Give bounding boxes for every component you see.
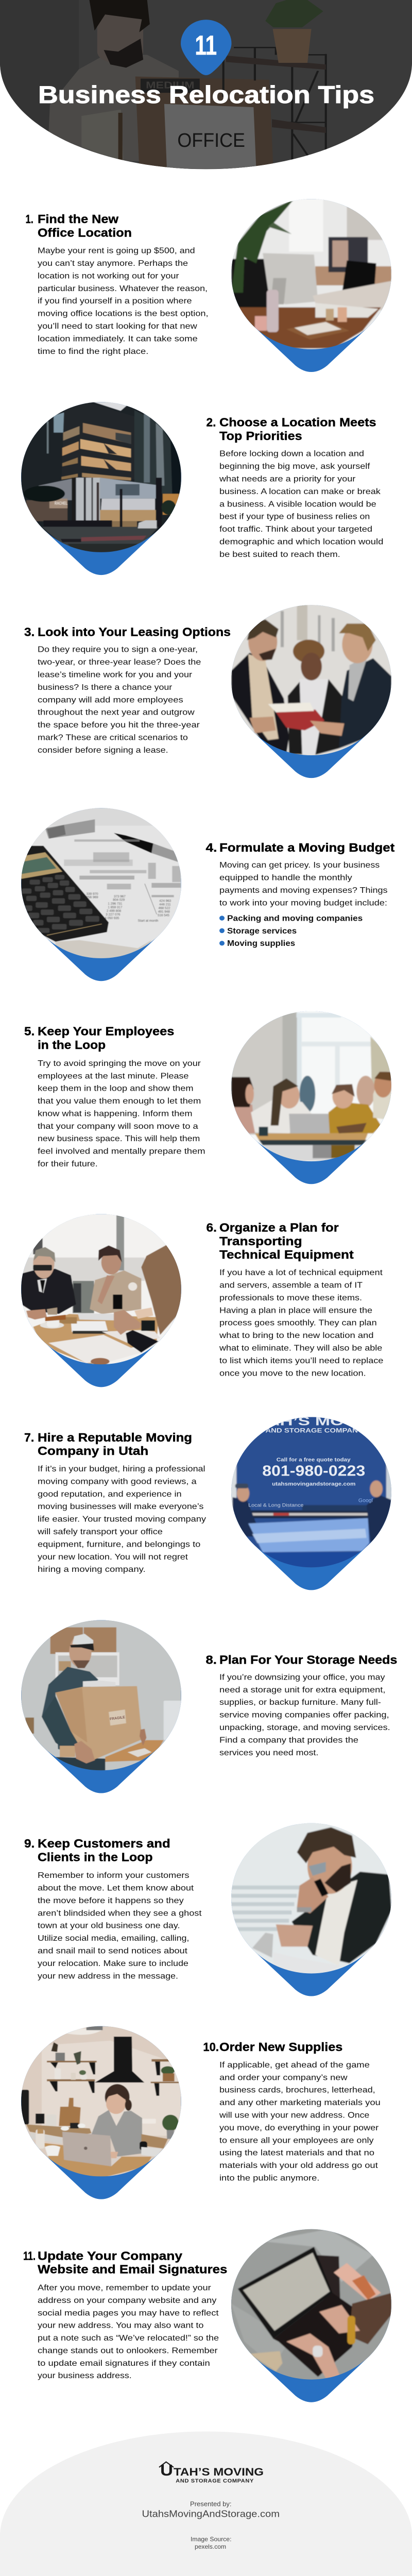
pin image: calculator and budget sheet: Start at month: [138, 919, 159, 923]
body text 3: throughout the next year and outgrow: [38, 708, 195, 717]
body text 7: good reputation, and experience in: [38, 1490, 182, 1499]
body text 5: Try to avoid springing the move on your: [38, 1059, 201, 1068]
pin image: calculator and budget sheet: 516 545: [158, 914, 169, 917]
body text 8: If you’re downsizing your office, you may: [219, 1673, 385, 1682]
body text 7: hiring a moving company.: [38, 1566, 146, 1574]
heading 1: Office Location: [38, 226, 132, 240]
body text 11: to update email signatures if they contain: [38, 2359, 210, 2368]
panel: tip 3: [24, 603, 394, 778]
body text 8: need a storage unit for extra equipment,: [219, 1686, 385, 1694]
body text 5: employees at the last minute. Please: [38, 1072, 189, 1080]
footer panel: [0, 2431, 412, 2576]
logo: Utah's Moving: U: [160, 2461, 173, 2479]
body text 6: what to eliminate. They will also be able: [219, 1344, 382, 1352]
body text 6: to list which items you’ll need to replace: [219, 1357, 384, 1365]
body text 2: business. A location can make or break: [219, 487, 381, 496]
bullet list: Storage services: [227, 927, 297, 936]
heading 5: Keep Your Employees: [38, 1025, 174, 1039]
pin image: woman at kitchen laptop: [21, 2026, 181, 2199]
body text 10: and any other marketing materials you: [219, 2099, 381, 2107]
body text 9: and snail mail to send notices about: [38, 1947, 187, 1955]
hero photo: OFFICE: [177, 129, 245, 151]
pin image: calculator and budget sheet: 491 948: [158, 910, 170, 914]
body text 1: Maybe your rent is going up $500, and: [38, 247, 195, 256]
body text 1: time to find the right place.: [38, 347, 148, 356]
pin image: moving truck: Googl: [358, 1498, 373, 1503]
body text 8: unpacking, storage, and moving services.: [219, 1723, 390, 1732]
heading 8: Plan For Your Storage Needs: [219, 1653, 397, 1667]
panel: tip 8: [21, 1620, 397, 1793]
heading 3: Look into Your Leasing Options: [38, 625, 231, 639]
pin image: office building: [21, 402, 181, 575]
pin image: calculator and budget sheet: 468 522: [159, 907, 170, 910]
body text 7: If it’s in your budget, hiring a professional: [38, 1465, 205, 1473]
panel: tip 6: [21, 1214, 384, 1387]
pin image: calculator and budget sheet: 446 211: [159, 903, 171, 906]
body text 6: If you have a lot of technical equipment: [219, 1269, 383, 1277]
pin image: team around laptop: [229, 1009, 394, 1184]
body text 10: [219, 2061, 381, 2182]
body text 11: your business address.: [38, 2372, 132, 2380]
heading 9: Keep Customers and: [38, 1837, 170, 1851]
body text 2: beginning the big move, ask yourself: [219, 463, 370, 471]
pin image: mover with box: [21, 1620, 181, 1793]
body text 6: once you move to the new location.: [219, 1369, 366, 1378]
presented by: Presented by:: [190, 2500, 232, 2507]
hero banner: [0, 0, 412, 174]
heading 3: 3.: [24, 625, 35, 639]
pin image: calculator and budget sheet: 424 963: [159, 899, 171, 903]
body text 5: that you value them enough to let them: [38, 1097, 201, 1106]
body text 11: put a note such as “We’ve relocated!” so the: [38, 2334, 219, 2343]
heading 5: [24, 1025, 174, 1052]
image source: pexels.com: [195, 2543, 226, 2550]
body text 1: [38, 247, 209, 356]
pin image: calculator and budget sheet: 2 499 808: [107, 909, 122, 913]
heading 2: Top Priorities: [219, 429, 302, 443]
body text 4: equipped to handle the monthly: [219, 874, 352, 882]
body text 10: and order your company’s new: [219, 2074, 348, 2082]
pin image: calculator and budget sheet: 804 029: [113, 899, 125, 902]
bullet list: Packing and moving companies: [227, 914, 363, 923]
heading 2: 2.: [207, 416, 216, 429]
body text 11: change stands out to onlookers. Remember: [38, 2347, 218, 2355]
body text 5: [38, 1059, 205, 1168]
body text 9: [38, 1872, 202, 1980]
panel: tip 7: [24, 1414, 394, 1590]
heading 1: Find the New: [38, 213, 118, 226]
pin image: office desk: [229, 196, 394, 372]
body text 6: process goes smoothly. They can plan: [219, 1319, 377, 1328]
pin image: moving truck: AND STORAGE COMPAN: [265, 1427, 358, 1434]
body text 3: consider before signing a lease.: [38, 746, 168, 755]
body text 4: payments and moving expenses? Things: [219, 886, 388, 895]
pin image: calculator and budget sheet: 3 227 076: [106, 913, 121, 917]
body text 7: equipment, furniture, and belongings to: [38, 1540, 200, 1549]
body text 11: address on your company website and any: [38, 2296, 216, 2305]
body text 10: business cards, brochures, letterhead,: [219, 2086, 375, 2095]
body text 9: the move before it happens so they: [38, 1896, 184, 1905]
body text 7: your new location. You will not regret: [38, 1553, 188, 1562]
body text 10: If applicable, get ahead of the game: [219, 2061, 370, 2070]
heading 7: 7.: [24, 1431, 34, 1445]
heading 7: [24, 1431, 192, 1458]
hero photo: [0, 0, 326, 174]
pin image: hands typing on laptop: [229, 2227, 394, 2402]
pin image: moving truck: utahsmovingandstorage.com: [272, 1482, 355, 1487]
body text 5: keep them in the loop and show them: [38, 1084, 194, 1093]
pin image: moving truck: [229, 1414, 394, 1590]
body text 3: [38, 646, 201, 755]
pin image: calculator and budget sheet: 4 050 935: [105, 917, 119, 920]
body text 6: professionals to move these items.: [219, 1294, 362, 1302]
panel: tip 9: [24, 1820, 394, 1996]
body text 2: a business. A visible location would be: [219, 500, 376, 509]
body text 8: services you need most.: [219, 1749, 318, 1757]
pin image: business meeting: [21, 1214, 181, 1387]
pin image: mover with box: FRAGILE: [109, 1715, 126, 1721]
body text 3: the space before you hit the three-year: [38, 721, 200, 730]
body text 2: best if your type of business relies on: [219, 513, 370, 521]
presented by: UtahsMovingAndStorage.com: [142, 2509, 280, 2519]
body text 5: know what is happening. Inform them: [38, 1110, 192, 1118]
logo: Utah's Moving: [159, 2461, 264, 2484]
body text 10: you move, do everything in your power: [219, 2124, 379, 2132]
heading 2: [207, 416, 376, 443]
body text 5: new business space. This will help them: [38, 1135, 200, 1143]
heading 2: Choose a Location Meets: [219, 416, 376, 429]
heading 9: [24, 1837, 170, 1864]
body text 9: your new address in the message.: [38, 1972, 178, 1980]
body text 9: Remember to inform your customers: [38, 1872, 189, 1880]
body text 8: service moving companies offer packing,: [219, 1711, 389, 1720]
body text 5: that your company will soon move to a: [38, 1122, 198, 1131]
heading 4: 4.: [206, 841, 217, 855]
body text 9: about the move. Let them know about: [38, 1884, 194, 1892]
body text 6: Having a plan in place will ensure the: [219, 1307, 372, 1315]
body text 7: moving company with good reviews, a: [38, 1478, 197, 1486]
image source: Image Source:: [191, 2536, 231, 2543]
body text 10: using the latest materials and that no: [219, 2149, 374, 2158]
heading 9: 9.: [24, 1837, 35, 1851]
body text 3: two-year, or three-year lease? Does the: [38, 658, 201, 667]
pin image: moving truck: Local & Long Distance: [248, 1502, 303, 1507]
body text 2: [219, 450, 383, 559]
heading 6: [207, 1221, 354, 1262]
body text 3: mark? These are critical scenarios to: [38, 734, 188, 742]
heading 11: [23, 2249, 227, 2276]
pin image: calculator and budget sheet: 1 296 731: [108, 902, 123, 906]
pin image: moving truck: AH’S MO: [267, 1414, 344, 1428]
body text 4: Moving can get pricey. Is your business: [219, 861, 380, 870]
panel: tip 11: [23, 2227, 394, 2402]
pin image: calculator and budget sheet: 373 967: [114, 895, 126, 899]
body text 2: what needs are a priority for your: [219, 475, 356, 483]
panel: tip 10: [21, 2026, 381, 2199]
heading 5: in the Loop: [38, 1039, 106, 1052]
presented by: [142, 2500, 280, 2519]
heading 11: Website and Email Signatures: [38, 2263, 227, 2276]
body text 11: After you move, remember to update your: [38, 2284, 212, 2292]
body text 9: your relocation. Make sure to include: [38, 1959, 188, 1968]
body text 5: feel involved and mentally prepare them: [38, 1147, 205, 1156]
body text 8: Find a company that provides the: [219, 1736, 358, 1744]
bullet list: Moving supplies: [227, 940, 295, 948]
body text 7: moving businesses will make everyone’s: [38, 1503, 203, 1511]
heading 6: 6.: [207, 1221, 217, 1234]
pin image: moving truck: Call for a free quote today: [277, 1457, 351, 1463]
hero pin: 11: 11: [195, 30, 217, 61]
body text 3: business? Is there a chance your: [38, 683, 173, 692]
body text 3: Do they require you to sign a one-year,: [38, 646, 198, 654]
body text 6: and servers, assemble a team of IT: [219, 1281, 363, 1290]
body text 3: lease’s timeline work for you and your: [38, 671, 193, 679]
panel: tip 4: [21, 808, 394, 981]
panel: tip 5: [24, 1009, 394, 1184]
body text 8: [219, 1673, 390, 1757]
body text 1: you can’t stay anymore. Perhaps the: [38, 259, 188, 268]
pin image: calculator and budget sheet: 1 859 317: [108, 906, 123, 909]
body text 2: demographic and which location would: [219, 538, 383, 546]
body text 9: aren’t blindsided when they see a ghost: [38, 1909, 202, 1918]
hero photo: MEDIUM: [146, 80, 195, 91]
body text 11: [38, 2284, 219, 2380]
heading 11: Update Your Company: [38, 2249, 183, 2263]
body text 2: be best suited to reach them.: [219, 550, 340, 559]
heading 11: 11.: [23, 2249, 36, 2263]
heading 8: 8.: [206, 1653, 217, 1667]
pin image: calculator and budget sheet: 256 969: [87, 896, 98, 899]
heading 10: 10.: [203, 2041, 219, 2054]
panel: tip 1: [26, 196, 394, 372]
heading 7: Hire a Reputable Moving: [38, 1431, 192, 1445]
body text 1: moving office locations is the best option,: [38, 310, 209, 318]
panel: tip 2: [21, 402, 383, 575]
pin image: moving truck: 801-980-0223: [262, 1463, 365, 1479]
body text 7: will safely transport your office: [37, 1528, 163, 1536]
pin image: calculator and budget sheet: [21, 808, 181, 981]
heading 9: Clients in the Loop: [38, 1851, 152, 1864]
body text 4: to work into your moving budget include:: [219, 899, 387, 907]
body text 5: for their future.: [38, 1160, 98, 1168]
body text 10: materials with your old address go out: [219, 2162, 378, 2170]
body text 2: foot traffic. Think about your targeted: [219, 526, 372, 534]
logo: Utah's Moving: AND STORAGE COMPANY: [176, 2478, 253, 2484]
heading 1: [26, 213, 132, 240]
bullet list: [219, 914, 363, 948]
heading 7: Company in Utah: [38, 1445, 148, 1458]
body text 6: what to bring to the new location and: [219, 1332, 374, 1340]
body text 1: particular business. Whatever the reason,: [38, 284, 208, 293]
image source: [191, 2536, 232, 2550]
body text 7: [37, 1465, 206, 1574]
body text 6: [219, 1269, 384, 1378]
body text 7: life easier. Your trusted moving company: [38, 1515, 206, 1524]
heading 6: Transporting: [219, 1235, 302, 1248]
body text 1: if you find yourself in a position where: [38, 297, 192, 306]
body text 1: you’ll need to start looking for that new: [38, 322, 197, 331]
heading 6: Technical Equipment: [219, 1248, 354, 1262]
body text 10: to ensure all your employees are only: [219, 2137, 374, 2145]
heading 4: Formulate a Moving Budget: [219, 841, 394, 855]
hero pin: 11: [181, 20, 232, 75]
logo: Utah's Moving: TAH’S MOVING: [174, 2465, 264, 2478]
pin image: calculator and budget sheet: 339 970: [87, 892, 98, 896]
body text 1: location immediately. It can take some: [38, 335, 198, 343]
body text 10: into the public anymore.: [219, 2174, 319, 2182]
pin image: three colleagues: [229, 603, 394, 778]
body text 9: Utilize social media, emailing, calling,: [38, 1935, 189, 1943]
body text 8: supplies, or backup furniture. Many full-: [219, 1699, 381, 1707]
body text 11: social media pages you may have to reflect: [38, 2309, 219, 2317]
title: Business Relocation Tips: [38, 81, 374, 108]
body text 11: your new address. You may also want to: [38, 2321, 204, 2330]
heading 1: 1.: [26, 213, 33, 226]
body text 1: location is not working out for your: [38, 272, 179, 280]
body text 10: will use with your new address. Once: [219, 2111, 369, 2120]
heading 5: 5.: [24, 1025, 35, 1039]
body text 9: town at your old business one day.: [38, 1922, 180, 1930]
pin image: man on phone: [229, 1820, 394, 1996]
pin image: office building: RACHEL: [55, 501, 67, 506]
heading 10: Order New Supplies: [219, 2041, 342, 2054]
body text 4: [219, 861, 388, 907]
heading 6: Organize a Plan for: [219, 1221, 339, 1234]
body text 3: company will add more employees: [38, 696, 183, 704]
body text 2: Before locking down a location and: [219, 450, 364, 459]
